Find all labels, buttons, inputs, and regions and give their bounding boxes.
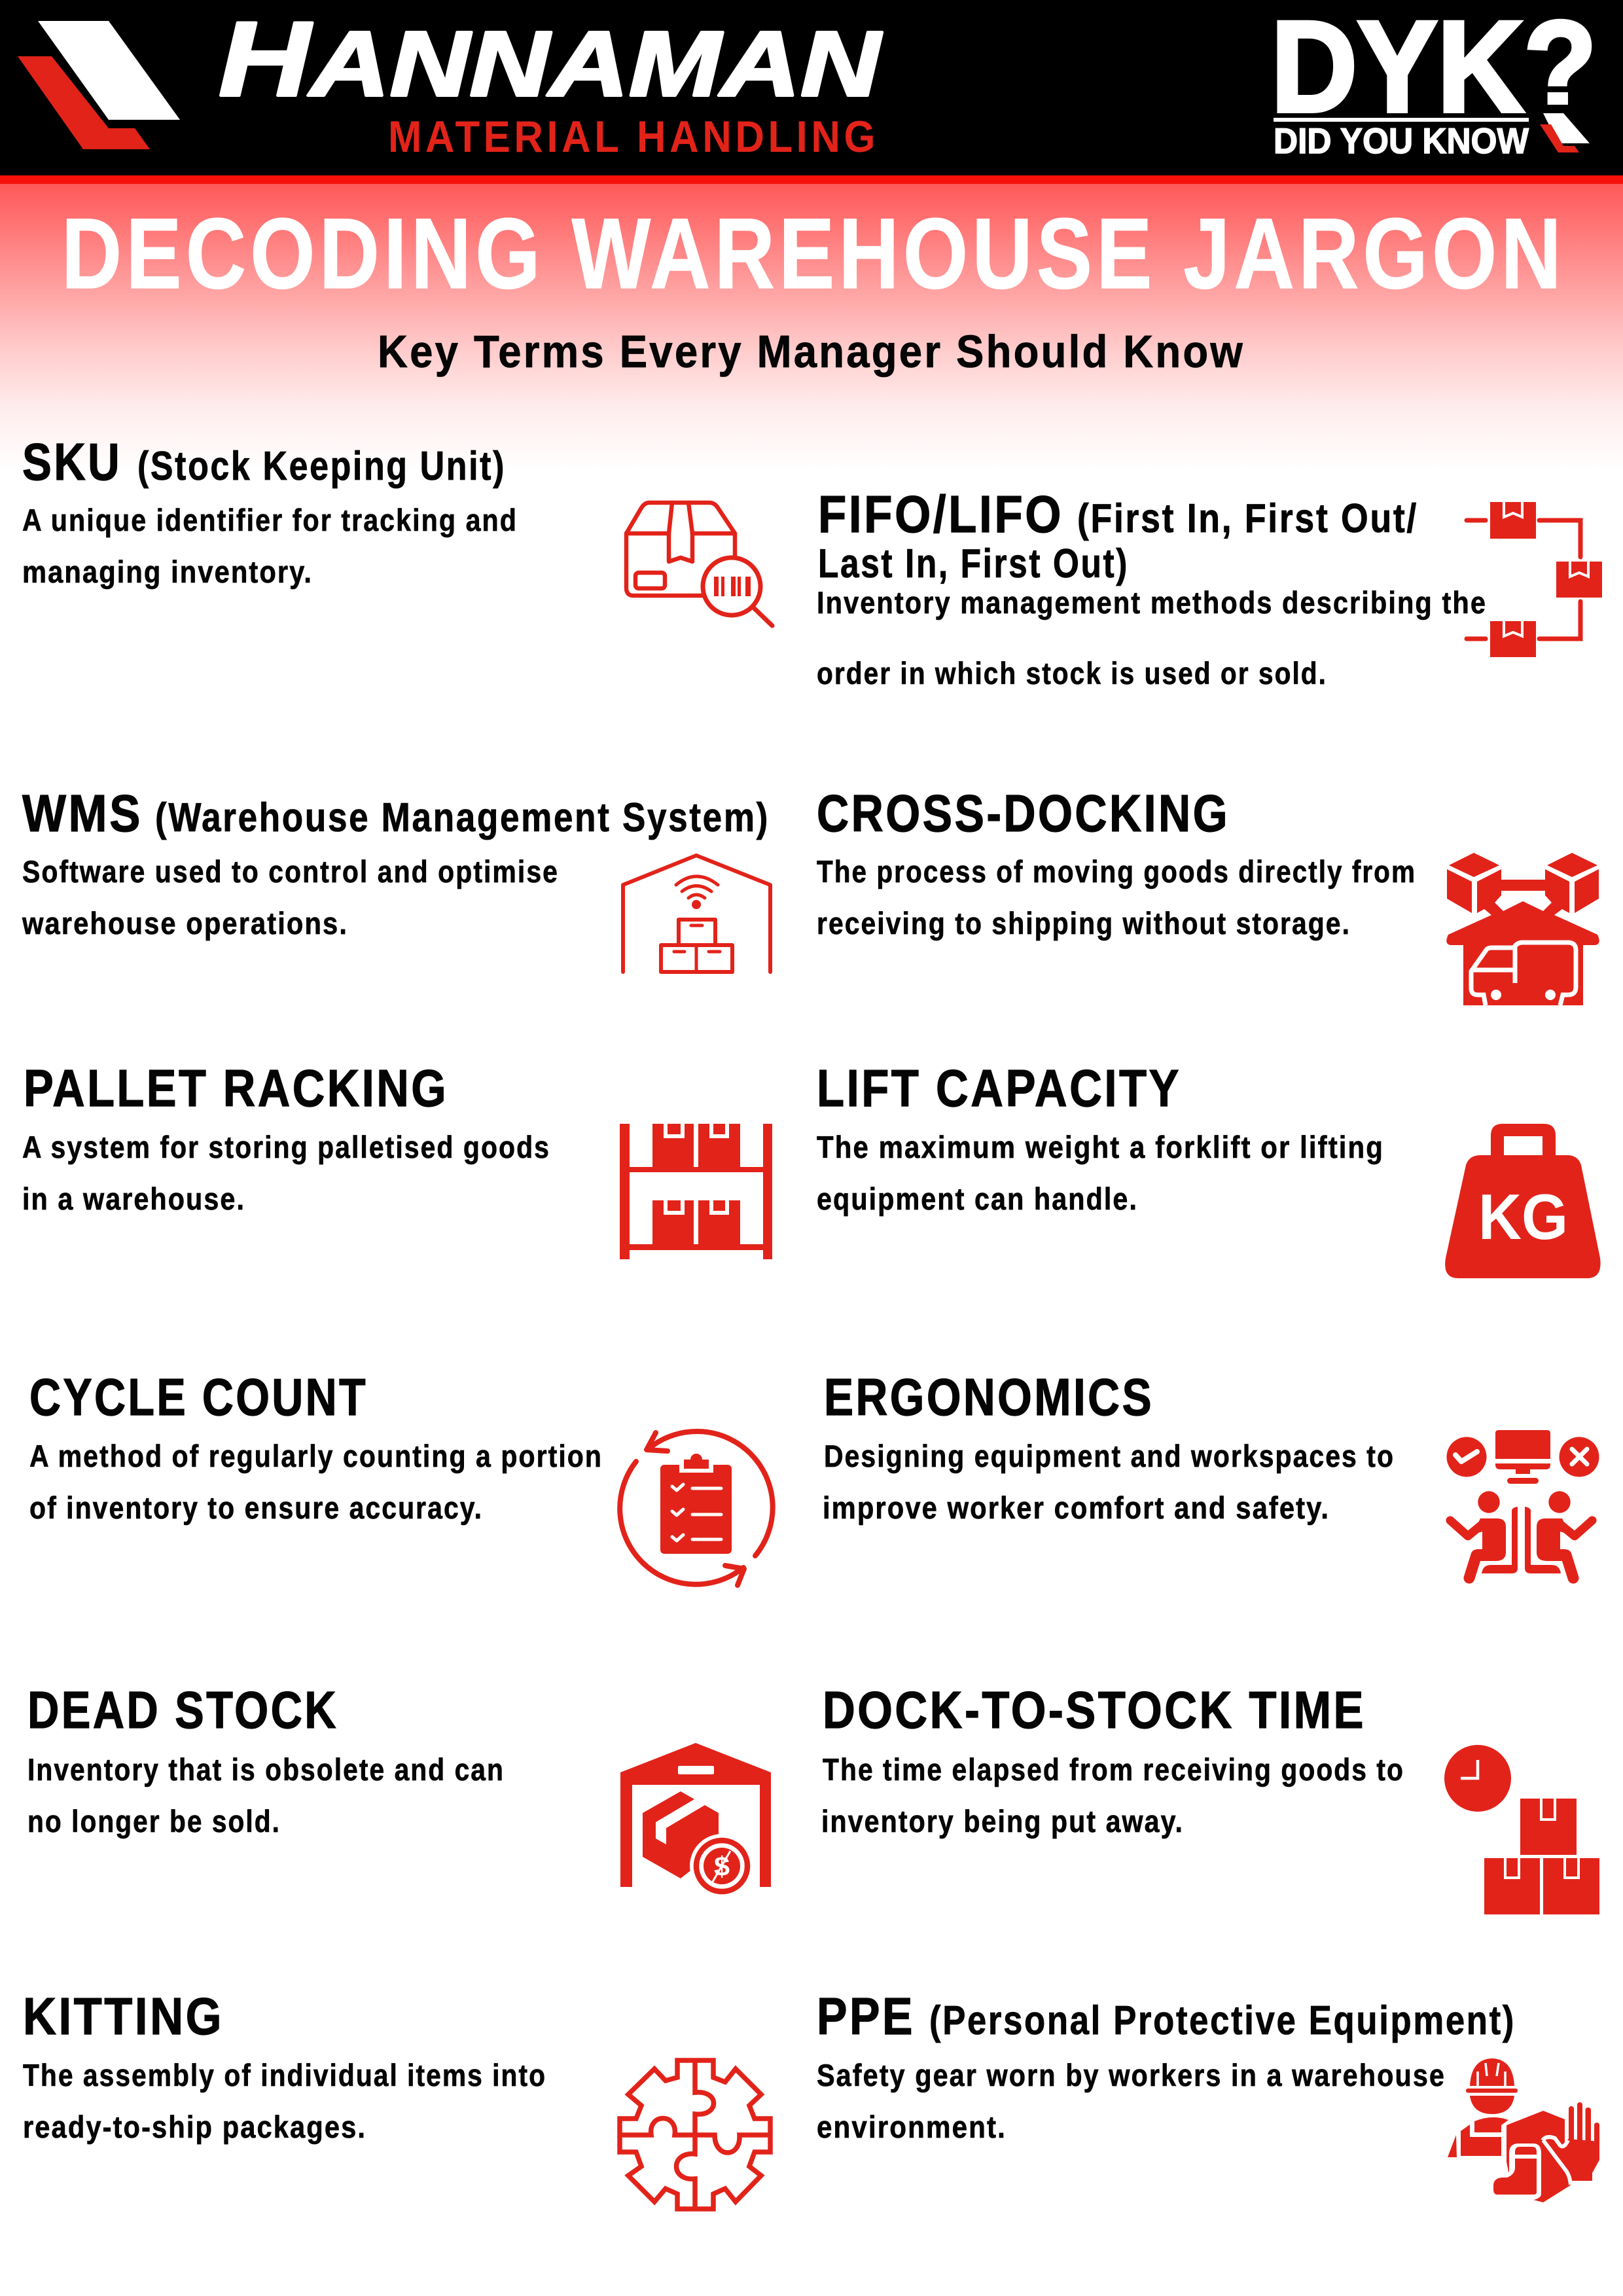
icon: cross-dock truck and boxes <box>1446 853 1599 1005</box>
logo: Material Handling: MATERIAL HANDLING <box>388 112 879 162</box>
text: WMS definition: warehouse operations. <box>22 906 348 941</box>
text: Dead stock definition: no longer be sold. <box>27 1804 281 1839</box>
text: SKU definition: managing inventory. <box>22 554 313 589</box>
header band <box>0 0 1623 184</box>
heading: Pallet racking: PALLET RACKING <box>24 1059 448 1117</box>
text: Dead stock definition: Inventory that is obsolete and can <box>27 1752 505 1787</box>
text: Pallet racking definition: A system for storing palletised goods <box>22 1130 550 1164</box>
logo: Hannaman wordmark: HANNAMAN <box>219 0 883 118</box>
panel: Cycle count <box>29 1368 773 1585</box>
panel: Cross-docking <box>817 784 1599 1005</box>
text: PPE definition <box>817 2058 1446 2144</box>
heading: PPE <box>817 1987 1516 2045</box>
heading: Cycle count: CYCLE COUNT <box>29 1368 368 1426</box>
icon: KG weight <box>1445 1124 1601 1278</box>
panel: PPE <box>817 1987 1599 2202</box>
text: FIFO/LIFO definition: order in which stock is used or sold. <box>817 656 1327 691</box>
text: Cycle count definition: of inventory to ensure accuracy. <box>29 1490 483 1525</box>
text: Pallet racking definition <box>22 1130 550 1216</box>
text: Cross-docking definition: receiving to shipping without storage. <box>817 906 1351 941</box>
heading: WMS: (Warehouse Management System) <box>155 795 770 840</box>
icon: warehouse with dead stock <box>620 1743 771 1898</box>
text: Pallet racking definition: in a warehouse. <box>22 1181 245 1216</box>
heading: WMS: WMS <box>22 784 143 842</box>
icon: puzzle gear <box>620 2060 770 2209</box>
logo: Hannaman mark <box>18 21 180 149</box>
heading: Ergonomics: ERGONOMICS <box>824 1368 1154 1426</box>
icon: KG weight: KG <box>1478 1181 1568 1253</box>
text: FIFO/LIFO definition <box>817 585 1487 691</box>
panel: SKU <box>22 433 772 626</box>
icon: pallet rack <box>620 1124 772 1259</box>
panel: Dead stock <box>27 1681 771 1898</box>
panel: Pallet racking <box>22 1059 772 1259</box>
text: Dock-to-stock definition <box>821 1752 1404 1839</box>
text: PPE definition: Safety gear worn by workers in a warehouse <box>817 2058 1446 2092</box>
heading: FIFO/LIFO: Last In, First Out) <box>818 541 1129 586</box>
icon: smart warehouse <box>623 855 770 972</box>
text: Cross-docking definition <box>817 854 1416 941</box>
text: Dock-to-stock definition: The time elapsed from receiving goods to <box>823 1752 1404 1787</box>
panel: Dock-to-stock time <box>821 1681 1599 1914</box>
heading: FIFO/LIFO: FIFO/LIFO <box>818 485 1063 543</box>
icon: worker with PPE <box>1448 2058 1599 2202</box>
text: WMS definition <box>22 854 559 941</box>
heading: Lift capacity: LIFT CAPACITY <box>817 1059 1181 1117</box>
heading: FIFO/LIFO: (First In, First Out/ <box>1077 496 1418 541</box>
text: Ergonomics definition <box>823 1439 1395 1525</box>
gradient background <box>0 184 1623 472</box>
icon: ergonomic workstation <box>1446 1430 1599 1578</box>
icon: warehouse with dead stock: $ <box>714 1851 730 1882</box>
text: SKU definition <box>22 503 518 589</box>
icon: box with barcode magnifier <box>626 503 772 626</box>
heading: SKU <box>22 433 506 491</box>
text: Lift capacity definition <box>817 1130 1384 1216</box>
icon: flow of boxes <box>1467 502 1602 657</box>
text: Cycle count definition <box>29 1439 603 1525</box>
text: Dock-to-stock definition: inventory being put away. <box>821 1804 1184 1839</box>
text: Ergonomics definition: Designing equipment and workspaces to <box>824 1439 1395 1473</box>
text: WMS definition: Software used to control and optimise <box>22 854 559 889</box>
heading: Dead stock: DEAD STOCK <box>27 1681 338 1739</box>
text: Kitting definition: The assembly of individual items into <box>23 2058 546 2092</box>
icon: clipboard with cycle arrows <box>620 1431 773 1585</box>
text: PPE definition: environment. <box>817 2109 1007 2144</box>
icon: clock and boxes <box>1444 1745 1599 1914</box>
panel: Kitting <box>23 1987 770 2209</box>
text: SKU definition: A unique identifier for tracking and <box>22 503 518 537</box>
heading: SKU: (Stock Keeping Unit) <box>137 444 506 489</box>
heading: SKU: SKU <box>22 433 122 491</box>
logo: DYK did you know: DID YOU KNOW <box>1274 120 1529 161</box>
text: Kitting definition: ready-to-ship packages. <box>23 2109 366 2144</box>
heading: WMS <box>22 784 770 842</box>
heading: Dock-to-stock time: DOCK-TO-STOCK TIME <box>823 1681 1366 1739</box>
heading: FIFO/LIFO <box>818 485 1418 586</box>
text: Dead stock definition <box>27 1752 505 1839</box>
panel: Ergonomics <box>823 1368 1599 1578</box>
text: Lift capacity definition: equipment can handle. <box>817 1181 1138 1216</box>
text: Lift capacity definition: The maximum weight a forklift or lifting <box>817 1130 1384 1164</box>
subtitle: Key Terms Every Manager Should Know <box>378 326 1245 377</box>
text: FIFO/LIFO definition: Inventory management methods describing the <box>817 585 1487 620</box>
heading: Kitting: KITTING <box>23 1987 224 2045</box>
heading: Cross-docking: CROSS-DOCKING <box>817 784 1230 842</box>
text: Ergonomics definition: improve worker comfort and safety. <box>823 1490 1330 1525</box>
text: Kitting definition <box>23 2058 546 2144</box>
heading: PPE: (Personal Protective Equipment) <box>929 1998 1516 2043</box>
panel: WMS <box>22 784 770 972</box>
heading: PPE: PPE <box>817 1987 915 2045</box>
panel: Lift capacity <box>817 1059 1601 1278</box>
panel: FIFO/LIFO <box>817 485 1602 691</box>
text: Cycle count definition: A method of regularly counting a portion <box>29 1439 603 1473</box>
text: Cross-docking definition: The process of moving goods directly from <box>817 854 1416 889</box>
